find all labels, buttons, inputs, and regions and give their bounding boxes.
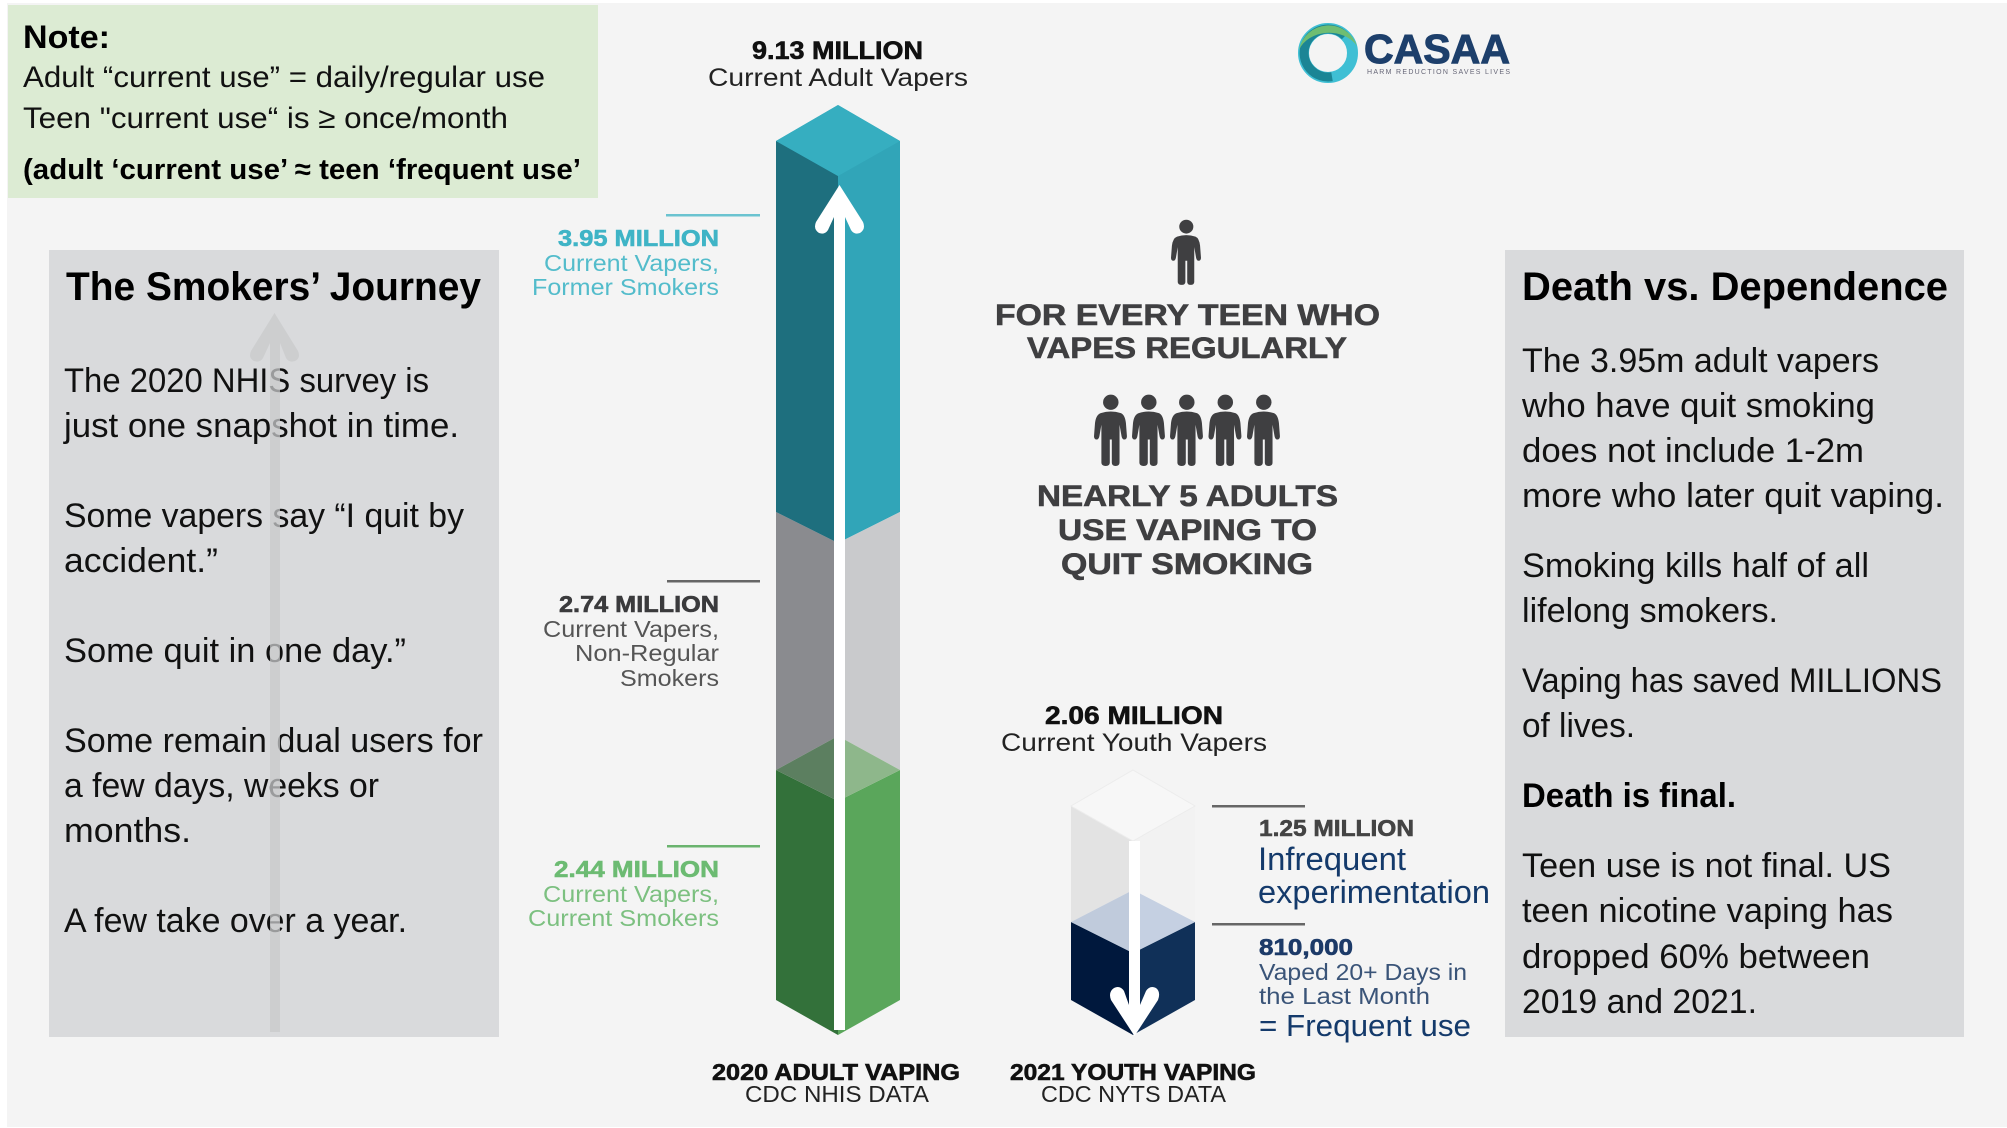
label: 1.25 million infrequent experimentation: 1.25 MILLION [1259,815,1414,841]
logo wordmark: CASAA [1364,26,1510,72]
icon: five adults [1094,395,1280,466]
youth total label [1001,702,1267,757]
statement: nearly 5 adults use vaping to quit smoking [1037,480,1338,581]
statement: nearly 5 adults use vaping to quit smoking: USE VAPING TO [1058,514,1317,547]
label: 810,000 frequent use [1212,923,1471,1043]
journey body text: The 2020 NHIS survey is [64,362,429,400]
journey body text: months. [64,812,191,850]
journey body text: just one snapshot in time. [63,407,459,445]
arrow: upward white arrow [815,185,864,1030]
statement: for every teen who vapes regularly: FOR EVERY TEEN WHO [995,299,1380,332]
label: 810,000 frequent use: = Frequent use [1259,1008,1471,1043]
note text: comparison: (adult ‘current use’ ≈ teen ‘frequent use’ [23,154,581,186]
death vs. dependence body text: Smoking kills half of all [1522,547,1869,585]
statement: for every teen who vapes regularly [995,299,1380,365]
panel: note [8,5,598,198]
chart: adult vaping column [776,105,900,1035]
statement: nearly 5 adults use vaping to quit smoking: NEARLY 5 ADULTS [1037,480,1338,513]
label: 2.44 million current smokers [528,845,760,931]
adult total label [708,37,968,92]
panel: the smokers' journey [49,250,499,1037]
youth total label: 2.06 MILLION [1045,702,1223,730]
heading: the smokers' journey: The Smokers’ Journey [66,265,482,309]
caption: 2021 youth vaping [1010,1059,1256,1107]
label: 3.95 million former smokers: 3.95 MILLION [558,225,719,251]
label: 2.74 million non-regular smokers: 2.74 MILLION [559,591,719,617]
statement: for every teen who vapes regularly: VAPES REGULARLY [1027,332,1347,365]
note text: adult definition: Adult “current use” = daily/regular use [23,61,545,94]
arrow: downward white arrow [1110,841,1159,1036]
death vs. dependence body text: Teen use is not final. US [1522,847,1891,885]
label: 2.44 million current smokers: Current Smokers [528,905,719,931]
caption: 2020 adult vaping: CDC NHIS DATA [745,1081,930,1107]
icon: single teen [1171,220,1201,285]
death vs. dependence body text: does not include 1-2m [1522,432,1864,470]
youth total label: Current Youth Vapers [1001,729,1267,757]
note text: teen definition: Teen "current use“ is ≥ once/month [23,102,508,135]
label: 810,000 frequent use: the Last Month [1259,983,1430,1009]
caption: 2021 youth vaping: CDC NYTS DATA [1041,1081,1227,1107]
death vs. dependence body text: lifelong smokers. [1522,592,1778,630]
death vs. dependence body text [1521,342,1944,1021]
label: 2.74 million non-regular smokers: Non-Regular [575,640,719,666]
heading: death vs. dependence: Death vs. Dependence [1522,265,1948,309]
journey body text [63,362,483,940]
label: 1.25 million infrequent experimentation: experimentation [1258,874,1490,910]
panel: death vs. dependence [1505,250,1964,1037]
label: 2.44 million current smokers: Current Vapers, [543,881,719,907]
label: 3.95 million former smokers [532,214,760,300]
label: 3.95 million former smokers: Former Smokers [532,274,719,300]
death vs. dependence body text: Vaping has saved MILLIONS [1522,662,1942,700]
label: 2.74 million non-regular smokers: Current Vapers, [543,616,719,642]
caption: 2020 adult vaping [712,1059,960,1107]
journey body text: accident.” [64,542,218,580]
label: 810,000 frequent use: Vaped 20+ Days in [1259,959,1467,985]
death vs. dependence body text: 2019 and 2021. [1522,983,1757,1021]
death vs. dependence body text: The 3.95m adult vapers [1522,342,1879,380]
death vs. dependence body text: of lives. [1522,707,1635,745]
adult total label: Current Adult Vapers [708,64,968,92]
death vs. dependence body text: teen nicotine vaping has [1522,892,1893,930]
adult total label: 9.13 MILLION [752,37,923,65]
label: 810,000 frequent use: 810,000 [1259,934,1353,960]
death vs. dependence body text: who have quit smoking [1521,387,1875,425]
icon: swirl ring [1299,25,1357,78]
label: 1.25 million infrequent experimentation [1212,805,1490,910]
journey body text: Some vapers say “I quit by [64,497,464,535]
label: 2.44 million current smokers: 2.44 MILLION [554,856,719,882]
logo: CASAA [1299,25,1510,78]
caption: 2020 adult vaping: 2020 ADULT VAPING [712,1059,960,1085]
note heading: Note: [23,19,110,55]
arrow: faded upward journey arrow [250,313,299,1032]
logo tagline: HARM REDUCTION SAVES LIVES [1367,69,1510,76]
statement: nearly 5 adults use vaping to quit smoking: QUIT SMOKING [1061,548,1313,581]
label: 2.74 million non-regular smokers [543,580,760,691]
journey body text: Some remain dual users for [64,722,483,760]
journey body text: A few take over a year. [64,902,407,940]
death vs. dependence body text: dropped 60% between [1522,938,1870,976]
death vs. dependence body text: Death is final. [1522,777,1736,815]
chart: youth vaping column [1071,770,1195,1036]
label: 2.74 million non-regular smokers: Smokers [620,665,719,691]
journey body text: a few days, weeks or [64,767,379,805]
label: 3.95 million former smokers: Current Vapers, [544,250,719,276]
death vs. dependence body text: more who later quit vaping. [1522,477,1944,515]
caption: 2021 youth vaping: 2021 YOUTH VAPING [1010,1059,1256,1085]
journey body text: Some quit in one day.” [64,632,406,670]
label: 1.25 million infrequent experimentation: Infrequent [1258,841,1406,877]
